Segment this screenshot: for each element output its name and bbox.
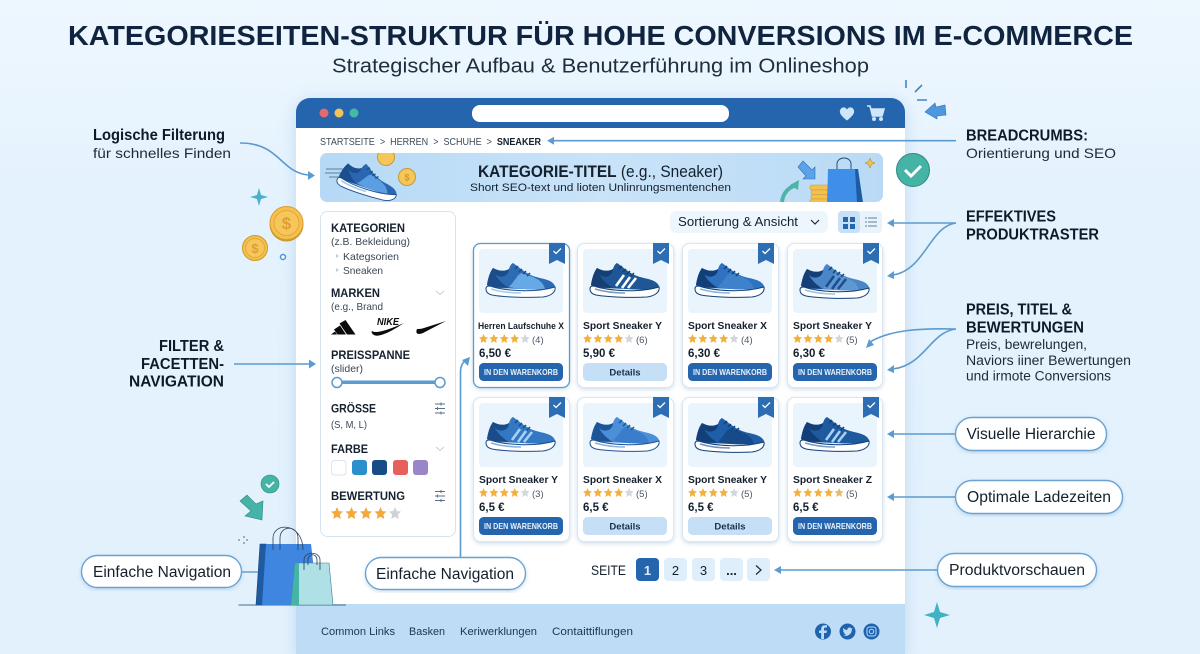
category banner bbox=[320, 153, 883, 202]
footer bbox=[296, 604, 905, 654]
annotation: Preis, Titel und Bewertungen: und irmote Conversions bbox=[966, 368, 1111, 384]
annotation: Preis, Titel und Bewertungen: Preis, bewrelungen, bbox=[966, 337, 1087, 352]
browser header bar bbox=[296, 98, 905, 128]
annotation: Filter und Facetten: FILTER & bbox=[159, 338, 224, 355]
product card 7: Details bbox=[714, 522, 746, 532]
icon: script logo: NIKE bbox=[377, 317, 399, 328]
decorative coins: $ bbox=[282, 214, 292, 233]
arrow: Produktvorschauen bbox=[774, 566, 937, 574]
filter: Farbe swatches: FARBE bbox=[331, 442, 368, 456]
product card 1 bbox=[474, 243, 570, 388]
pagination: SEITE bbox=[591, 563, 626, 578]
banner art left bbox=[325, 153, 416, 201]
banner SEO text: Short SEO-text und lioten Unlinrungsmentenchen bbox=[470, 182, 731, 194]
product card 4: Sport Sneaker Y bbox=[793, 320, 872, 332]
search bar bbox=[472, 105, 729, 122]
filter: Marken: (e.g., Brand bbox=[331, 301, 383, 313]
sort dropdown bbox=[670, 211, 828, 233]
product card 7 bbox=[682, 397, 778, 542]
filter: Bewertung stars: BEWERTUNG bbox=[331, 489, 405, 503]
pill: Einfache Navigation left bbox=[82, 556, 258, 588]
product card 3: IN DEN WARENKORB bbox=[693, 367, 767, 377]
product card 7: (5) bbox=[741, 489, 753, 500]
annotation: Preis, Titel und Bewertungen bbox=[966, 302, 1131, 384]
product card 3: (4) bbox=[741, 335, 753, 346]
sort dropdown: Sortierung & Ansicht bbox=[678, 215, 799, 229]
product card 1: (4) bbox=[532, 335, 544, 346]
product card 4: IN DEN WARENKORB bbox=[798, 367, 872, 377]
icon: stripes logo bbox=[331, 320, 356, 334]
sidebar filter panel bbox=[320, 212, 456, 536]
pill: Einfache Navigation center bbox=[366, 558, 526, 590]
product card 5 bbox=[474, 397, 570, 542]
annotation: logische Filterung bbox=[93, 127, 231, 161]
footer links: Keriwerklungen bbox=[460, 626, 537, 638]
view toggle bbox=[838, 211, 882, 233]
annotation: Effektives Produktraster bbox=[966, 208, 1099, 244]
icon: corner arrow and ticks bbox=[906, 80, 946, 119]
pagination: ... bbox=[726, 563, 737, 578]
icon: teal check and arrow bbox=[238, 475, 279, 544]
filter: Kategorien: Sneaken bbox=[343, 265, 383, 277]
banner art left: $ bbox=[404, 172, 410, 182]
icon: sparkle bbox=[924, 602, 950, 628]
product card 6: (5) bbox=[636, 489, 648, 500]
arrow: Optimale Ladezeiten bbox=[887, 493, 955, 501]
filter: Marken: MARKEN bbox=[331, 286, 380, 300]
filter: Bewertung stars bbox=[331, 489, 445, 519]
banner art right bbox=[782, 158, 875, 204]
product card 7: Sport Sneaker Y bbox=[688, 474, 767, 486]
pill: Visuelle Hierarchie: Visuelle Hierarchie bbox=[966, 426, 1096, 443]
filter: Groesse: GRÖSSE bbox=[331, 400, 376, 416]
product card 3 bbox=[682, 243, 778, 388]
annotation: Effektives Produktraster: PRODUKTRASTER bbox=[966, 226, 1099, 244]
product card 6: Details bbox=[609, 522, 641, 532]
product card 5: 6,5 € bbox=[479, 502, 505, 514]
product card 6: 6,5 € bbox=[583, 502, 609, 514]
pill: Produktvorschauen: Produktvorschauen bbox=[949, 562, 1085, 579]
banner heading: KATEGORIE-TITEL (e.g., Sneaker) bbox=[478, 163, 723, 181]
product card 3: Sport Sneaker X bbox=[688, 320, 767, 332]
filter: Kategorien: Kategsorien bbox=[343, 251, 399, 263]
filter: Groesse: (S, M, L) bbox=[331, 419, 367, 431]
decorative coins: $ bbox=[251, 241, 259, 256]
annotation: Preis, Titel und Bewertungen: BEWERTUNGEN bbox=[966, 320, 1084, 336]
subtitle: Strategischer Aufbau & Benutzerführung im Onlineshop bbox=[332, 54, 869, 78]
product card 5: IN DEN WARENKORB bbox=[484, 521, 558, 531]
pill: Visuelle Hierarchie bbox=[956, 418, 1106, 450]
annotation: Filter und Facetten bbox=[129, 338, 224, 390]
filter: Kategorien: KATEGORIEN bbox=[331, 221, 405, 235]
icon: heart bbox=[840, 107, 854, 120]
pill: Einfache Navigation left: Einfache Navigation bbox=[93, 564, 231, 581]
icon: swoosh logo bbox=[416, 321, 446, 334]
annotation: Preis, Titel und Bewertungen: PREIS, TITEL & bbox=[966, 302, 1072, 318]
annotation: Filter und Facetten: NAVIGATION bbox=[129, 374, 224, 390]
arrows: Preis bbox=[866, 329, 956, 373]
annotation: Breadcrumbs bbox=[966, 128, 1116, 161]
footer links: Common Links bbox=[321, 626, 396, 638]
check badge bbox=[896, 154, 930, 186]
title: KATEGORIESEITEN-STRUKTUR FÜR HOHE CONVERSIONS IM E-COMMERCE bbox=[68, 20, 1133, 51]
arrows: Produktraster bbox=[887, 219, 956, 279]
pill: Produktvorschauen bbox=[938, 554, 1096, 586]
arrow: Filterung to banner bbox=[240, 143, 315, 180]
annotation: Breadcrumbs: BREADCRUMBS: bbox=[966, 128, 1088, 144]
product card 2: Details bbox=[609, 368, 641, 378]
product card 8: Sport Sneaker Z bbox=[793, 474, 873, 486]
product card 2 bbox=[578, 243, 674, 388]
icon: cart bbox=[867, 106, 884, 120]
breadcrumbs: STARTSEITE > HERREN > SCHUHE > SNEAKER bbox=[320, 136, 541, 148]
pagination: 3 bbox=[700, 563, 707, 578]
annotation: logische Filterung: Logische Filterung bbox=[93, 127, 225, 144]
product card 1: 6,50 € bbox=[479, 348, 512, 360]
product card 7: 6,5 € bbox=[688, 502, 714, 514]
footer links: Basken bbox=[409, 626, 445, 638]
illustration: shopping bags bbox=[238, 527, 346, 605]
pill: Einfache Navigation center: Einfache Navigation bbox=[376, 566, 514, 583]
filter: Kategorien: (z.B. Bekleidung) bbox=[331, 236, 410, 248]
annotation: Effektives Produktraster: EFFEKTIVES bbox=[966, 208, 1056, 226]
product card 1: IN DEN WARENKORB bbox=[484, 367, 558, 377]
annotation: Preis, Titel und Bewertungen: Naviors iiner Bewertungen bbox=[966, 353, 1131, 368]
product card 2: 5,90 € bbox=[583, 348, 616, 360]
annotation: logische Filterung: für schnelles Finden bbox=[93, 145, 231, 161]
product card 2: Sport Sneaker Y bbox=[583, 320, 662, 332]
pagination bbox=[591, 558, 770, 581]
pagination: 1 bbox=[644, 563, 651, 578]
pill: Optimale Ladezeiten bbox=[956, 480, 1122, 514]
product card 5: (3) bbox=[532, 489, 544, 500]
arrow: Filter to sidebar bbox=[234, 360, 316, 368]
filter: Preisspanne slider: PREISSPANNE bbox=[331, 348, 410, 362]
footer links: Contaittiflungen bbox=[552, 626, 633, 638]
browser window bbox=[296, 98, 905, 654]
annotation: Breadcrumbs: Orientierung und SEO bbox=[966, 145, 1116, 161]
product card 4 bbox=[788, 243, 882, 388]
filter: Kategorien bbox=[331, 221, 410, 277]
product card 1: Herren Laufschuhe X bbox=[478, 321, 565, 332]
product card 4: (5) bbox=[846, 335, 858, 346]
filter: Marken bbox=[331, 286, 446, 336]
arrow: Visuelle Hierarchie bbox=[887, 430, 955, 438]
filter: Preisspanne slider bbox=[331, 348, 445, 388]
filter: Preisspanne slider: (slider) bbox=[331, 363, 363, 375]
arrow: Breadcrumbs bbox=[547, 137, 956, 145]
decorative coins bbox=[242, 188, 304, 260]
annotation: Filter und Facetten: FACETTEN- bbox=[141, 356, 224, 373]
product card 8: 6,5 € bbox=[793, 502, 819, 514]
social icons bbox=[815, 624, 880, 640]
arrow: Navigation up to grid bbox=[460, 357, 470, 558]
product card 8: IN DEN WARENKORB bbox=[798, 521, 872, 531]
pill: Optimale Ladezeiten: Optimale Ladezeiten bbox=[967, 489, 1111, 506]
product card 6: Sport Sneaker X bbox=[583, 474, 662, 486]
filter: Farbe swatches bbox=[331, 442, 444, 475]
footer links bbox=[321, 626, 633, 638]
product card 2: (6) bbox=[636, 335, 648, 346]
product card 6 bbox=[578, 397, 674, 542]
product card 8 bbox=[788, 397, 882, 542]
product card 4: 6,30 € bbox=[793, 348, 826, 360]
product card 8: (5) bbox=[846, 489, 858, 500]
product card 5: Sport Sneaker Y bbox=[479, 474, 558, 486]
filter: Groesse bbox=[331, 400, 445, 431]
product card 3: 6,30 € bbox=[688, 348, 721, 360]
window dots bbox=[320, 108, 358, 118]
pagination: 2 bbox=[672, 563, 679, 578]
